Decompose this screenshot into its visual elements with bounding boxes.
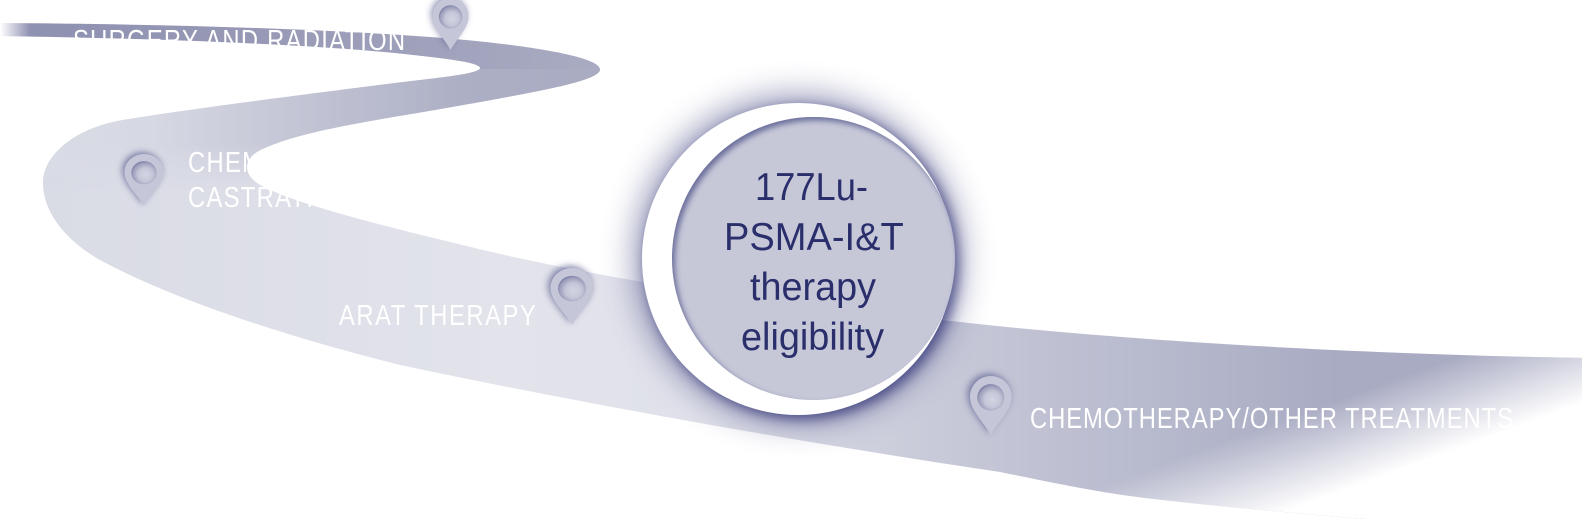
icon: map pin 3 [548, 266, 594, 325]
label: ARAT therapy: ARAT THERAPY [339, 299, 536, 332]
label: chemotherapy and other treatments: CHEMOTHERAPY/OTHER TREATMENTS [1030, 402, 1513, 435]
badge text: eligibility [741, 316, 884, 359]
icon: map pin 2 [123, 152, 164, 206]
icon: map pin 1 [431, 0, 469, 50]
label: chemotherapy and castration: CASTRATION [188, 181, 353, 214]
icon: map pin 4 [968, 374, 1012, 435]
central eligibility badge [634, 90, 990, 430]
label: chemotherapy and castration: CHEMOTHERAPY AND [188, 146, 465, 179]
badge text: therapy [750, 266, 876, 309]
label: surgery and radiation: SURGERY AND RADIATION [73, 24, 405, 57]
badge text: PSMA-I&T [724, 216, 903, 259]
badge text: 177Lu- [755, 166, 868, 209]
